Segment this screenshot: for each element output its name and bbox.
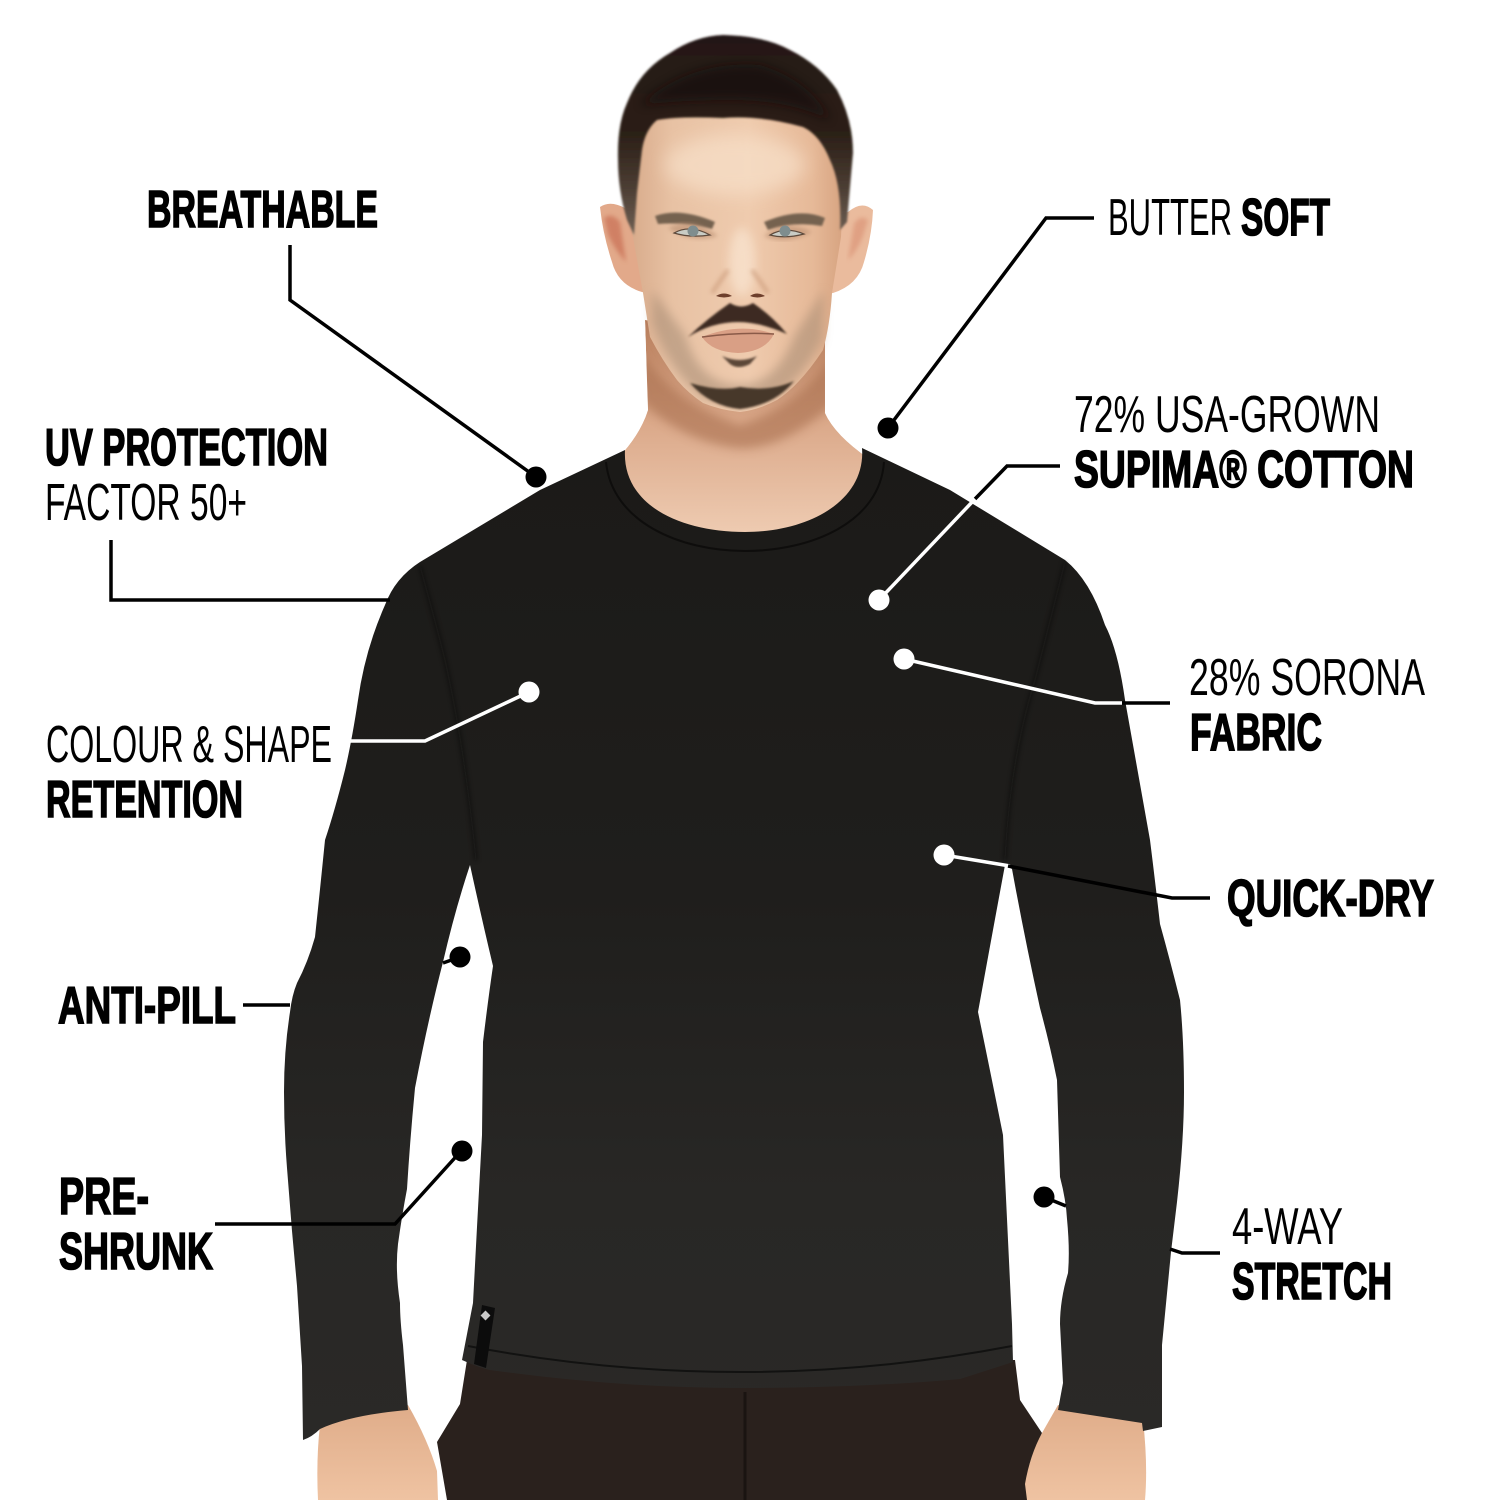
callout: sorona fabric	[894, 648, 1425, 762]
leader line	[1044, 1197, 1220, 1253]
marker dot	[868, 590, 890, 610]
label: BREATHABLE	[147, 181, 378, 239]
forehead highlight	[665, 135, 805, 195]
label: SOFT	[1241, 189, 1330, 247]
label: SHRUNK	[59, 1223, 213, 1281]
label	[45, 419, 328, 532]
right ear	[815, 205, 873, 295]
nose and cheek highlight	[729, 228, 755, 296]
leader line	[215, 1150, 462, 1224]
marker dot	[518, 682, 540, 702]
face	[630, 90, 845, 412]
leader line	[975, 466, 1060, 499]
callout: 4-way stretch	[1034, 1186, 1392, 1311]
label	[1232, 1198, 1392, 1311]
hem tag	[474, 1305, 495, 1368]
callout: breathable	[147, 181, 546, 488]
left ear	[600, 204, 660, 295]
man in long sleeve shirt	[284, 35, 1184, 1500]
lips	[702, 329, 774, 353]
callout: colour and shape retention	[46, 682, 540, 829]
marker dot	[452, 1140, 472, 1162]
nose	[712, 270, 768, 293]
label	[1074, 386, 1414, 499]
callout: butter soft	[878, 189, 1330, 438]
marker dot	[878, 418, 898, 438]
callout: pre-shrunk	[59, 1140, 472, 1281]
label: FABRIC	[1190, 704, 1322, 762]
label: STRETCH	[1232, 1253, 1392, 1311]
leader line	[111, 540, 390, 600]
eyebrows	[655, 213, 715, 229]
callout: anti-pill	[58, 946, 470, 1035]
label: BUTTER	[1108, 189, 1232, 247]
label: PRE-	[59, 1168, 149, 1226]
leader line	[888, 218, 1094, 428]
collar rib	[606, 462, 884, 551]
right hand	[1025, 1405, 1146, 1500]
leader line	[944, 855, 1010, 866]
left hand	[317, 1405, 438, 1500]
label	[46, 716, 332, 829]
marker dot	[526, 466, 546, 488]
label: RETENTION	[46, 771, 243, 829]
leader line	[904, 659, 1122, 703]
leader line	[290, 245, 536, 477]
label: COLOUR & SHAPE	[46, 716, 332, 774]
label: UV PROTECTION	[45, 419, 328, 477]
label	[59, 1168, 213, 1281]
label	[1189, 649, 1425, 762]
label: FACTOR 50+	[45, 474, 247, 532]
marker dot	[894, 648, 914, 670]
trousers	[437, 1360, 1042, 1500]
marker dot	[450, 946, 470, 968]
label: ANTI-PILL	[58, 977, 236, 1035]
label: 4-WAY	[1232, 1198, 1343, 1256]
eyes	[674, 229, 710, 236]
leader line	[243, 957, 460, 1005]
callout: quick-dry	[934, 844, 1434, 928]
marker dot	[934, 844, 954, 866]
callout: supima cotton	[868, 386, 1414, 610]
hem stitch	[468, 1346, 1012, 1372]
eye shadows	[668, 223, 812, 240]
beard	[690, 381, 794, 409]
marker dot	[1034, 1186, 1054, 1208]
sleeve seams	[420, 566, 476, 860]
callout: uv protection	[45, 419, 390, 600]
moustache	[688, 303, 787, 337]
stubble	[652, 290, 824, 406]
shirt	[284, 448, 1184, 1440]
leader line	[350, 692, 529, 741]
neck	[624, 320, 862, 532]
hair	[618, 35, 853, 235]
